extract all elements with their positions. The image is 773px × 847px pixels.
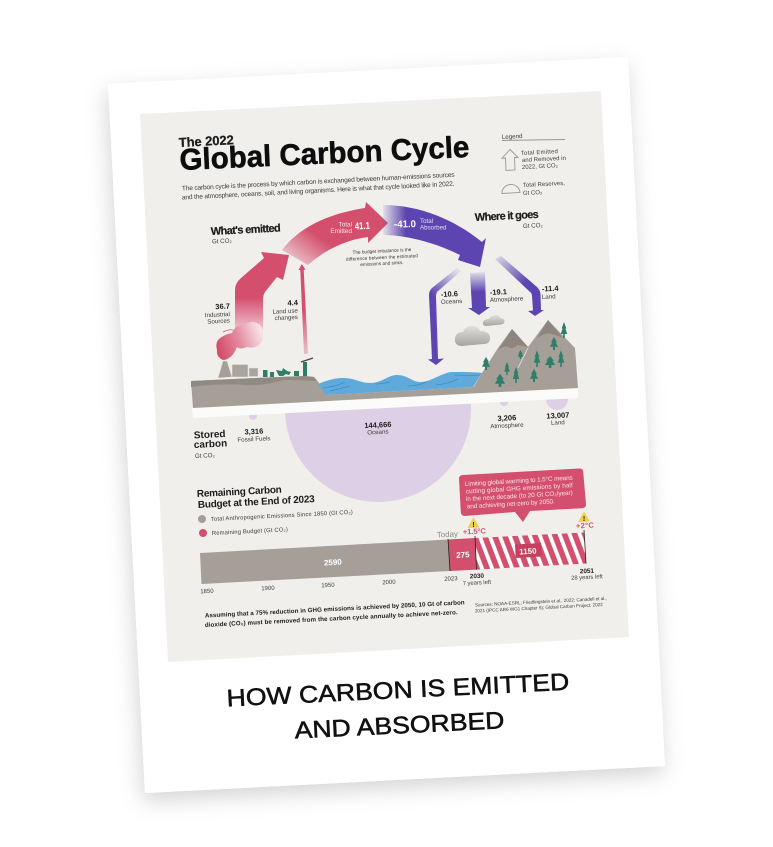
- values: what is emitted and absorbed: Land use: [272, 307, 299, 316]
- label: total absorbed: Total: [420, 218, 433, 225]
- values: what is emitted and absorbed: 4.4: [287, 298, 299, 308]
- heading: where it goes: Gt CO₂: [523, 222, 544, 230]
- stored carbon values: 3,206: [497, 413, 516, 423]
- timeline markers: +2°C: [576, 521, 595, 530]
- ground top layer: [191, 376, 317, 387]
- stored carbon values: Fossil Fuels: [237, 435, 271, 444]
- sources: 2021 (IPCC AR6 WG1 Chapter 5); Global Carbon Project, 2022: [475, 602, 603, 613]
- timeline axis: 1900: [261, 586, 275, 592]
- heading: what's emitted: Gt CO₂: [212, 237, 233, 245]
- arrow: total absorbed: [383, 205, 486, 267]
- timeline axis: 2030: [470, 573, 485, 580]
- intro text: The carbon cycle is the process by which carbon is exchanged between human-emissions sources: [182, 172, 455, 192]
- remaining budget heading: Remaining Carbon: [197, 485, 282, 500]
- timeline markers: Today: [437, 529, 458, 539]
- timeline markers: [437, 521, 595, 539]
- legend: and Removed in: [522, 156, 566, 164]
- tree stumps and axe: [263, 358, 313, 377]
- values: what is emitted and absorbed: Industrial: [205, 311, 230, 319]
- values: what is emitted and absorbed: 36.7: [215, 302, 230, 311]
- legend: Total Emitted: [521, 149, 558, 157]
- budget legend: [198, 510, 353, 537]
- label: total absorbed: -41.0: [394, 219, 416, 230]
- timeline axis: 28 years left: [571, 574, 603, 582]
- factory: [218, 361, 258, 378]
- legend: Total Reserves,: [523, 181, 565, 189]
- label: total emitted: Total: [338, 222, 352, 228]
- budget imbalance note: The budget imbalance is the: [352, 247, 412, 255]
- intro text: and the atmosphere, oceans, soil, and living organisms. Here is what that cycle looked like in 2022.: [182, 181, 455, 201]
- ground: [191, 376, 578, 408]
- budget imbalance note: difference between the estimated: [346, 253, 418, 262]
- timeline axis: [200, 568, 603, 595]
- stored carbon values: 13,007: [546, 410, 570, 421]
- warning icons: !: [583, 516, 585, 523]
- arrow: to oceans: [428, 268, 461, 365]
- budget imbalance note: emissions and sinks.: [360, 260, 404, 267]
- arrow: to land: [495, 256, 544, 316]
- trees on mountains: [482, 322, 567, 387]
- timeline axis: 7 years left: [463, 580, 492, 587]
- stored carbon heading: Gt CO₂: [195, 452, 216, 460]
- values: what is emitted and absorbed: Atmosphere: [490, 295, 524, 304]
- label: total absorbed: Absorbed: [420, 224, 447, 232]
- legend: 2022, Gt CO₂: [522, 163, 559, 171]
- reserves semicircles: [249, 398, 568, 502]
- budget bar: 1150: [519, 547, 537, 556]
- timeline markers: +1.5°C: [463, 526, 487, 536]
- icon: legend dome: [502, 184, 520, 194]
- icon: legend arrow: [502, 150, 518, 170]
- label: total absorbed: [394, 218, 447, 232]
- intro text: [182, 172, 455, 201]
- values: what is emitted and absorbed: Sources: [207, 318, 230, 326]
- heading: what's emitted: [211, 222, 281, 245]
- remaining budget heading: [197, 485, 315, 511]
- timeline axis: 1850: [200, 589, 214, 595]
- budget bar: 2590: [324, 558, 343, 567]
- label: total emitted: [330, 221, 370, 235]
- arrow: to atmosphere: [468, 272, 490, 315]
- values: what is emitted and absorbed: -19.1: [490, 287, 507, 297]
- values: what is emitted and absorbed: changes: [274, 314, 298, 322]
- timeline axis: 1950: [321, 583, 335, 589]
- caption: [226, 669, 570, 744]
- values: what is emitted and absorbed: -11.4: [542, 284, 560, 293]
- warning icons: !: [472, 522, 475, 529]
- stored carbon values: Oceans: [367, 428, 389, 437]
- label: total emitted: 41.1: [355, 221, 370, 232]
- stored carbon values: 144,666: [364, 420, 392, 430]
- callout: [459, 468, 586, 522]
- stored carbon values: 3,316: [244, 427, 263, 436]
- callout: Limiting global warming to 1.5°C means: [465, 474, 573, 488]
- arrow: total emitted: [282, 202, 388, 265]
- timeline axis: 2023: [444, 576, 458, 583]
- smoke: [216, 322, 263, 360]
- arrow: land use changes: [298, 264, 308, 354]
- footnote: dioxide (CO₂) must be removed from the carbon cycle annually to achieve net-zero.: [205, 609, 458, 629]
- footnote: Assuming that a 75% reduction in GHG emissions is achieved by 2050, 10 Gt of carbon: [205, 599, 465, 619]
- arrow: industrial sources: [235, 252, 289, 330]
- callout: cutting global GHG emissions by half: [466, 482, 573, 495]
- ocean: [318, 372, 482, 395]
- callout: in the next decade (to 20 Gt CO₂/year): [466, 490, 573, 503]
- title: Global Carbon Cycle: [179, 131, 470, 177]
- budget imbalance note: [346, 247, 418, 267]
- ocean ripples: [323, 375, 480, 391]
- label: total emitted: Emitted: [330, 228, 352, 235]
- caption: HOW CARBON IS EMITTED: [226, 669, 570, 712]
- timeline axis: 2051: [580, 568, 595, 575]
- budget bar: [200, 530, 586, 584]
- values: what is emitted and absorbed: Oceans: [441, 298, 462, 306]
- legend: Gt CO₂: [523, 190, 543, 197]
- callout: and achieving net-zero by 2050.: [467, 498, 555, 510]
- budget legend: Total Anthropogenic Emissions Since 1850 (Gt CO₂): [211, 510, 353, 523]
- warning icons: [468, 512, 590, 529]
- white strip: [192, 388, 578, 418]
- legend: Legend: [502, 133, 523, 141]
- infographic panel: [140, 91, 629, 662]
- sources: Sources: NOAA-ESRL; Friedlingstein et al., 2022; Canadell et al.,: [475, 596, 607, 607]
- values: what is emitted and absorbed: [205, 284, 560, 326]
- paper card: [108, 57, 665, 793]
- timeline axis: 2000: [382, 580, 396, 586]
- heading: where it goes: [475, 209, 544, 230]
- legend: [502, 133, 566, 197]
- values: what is emitted and absorbed: -10.6: [441, 289, 458, 299]
- stored carbon heading: carbon: [194, 438, 227, 451]
- heading: what's emitted: What's emitted: [211, 222, 281, 238]
- sources: [475, 596, 607, 613]
- stored carbon heading: [194, 429, 227, 460]
- stored carbon heading: Stored: [194, 429, 226, 441]
- remaining budget heading: Budget at the End of 2023: [198, 494, 315, 511]
- stored carbon values: [237, 410, 570, 444]
- budget legend: Remaining Budget (Gt CO₂): [212, 527, 288, 537]
- stored carbon values: Atmosphere: [490, 422, 524, 430]
- title: The 2022: [178, 132, 234, 150]
- stored carbon values: Land: [551, 419, 566, 427]
- caption: AND ABSORBED: [294, 707, 505, 744]
- heading: where it goes: Where it goes: [475, 209, 539, 224]
- budget bar: 275: [456, 550, 470, 560]
- footnote: [205, 599, 465, 629]
- mountains: [473, 320, 578, 388]
- clouds: [455, 315, 504, 346]
- values: what is emitted and absorbed: Land: [542, 293, 556, 301]
